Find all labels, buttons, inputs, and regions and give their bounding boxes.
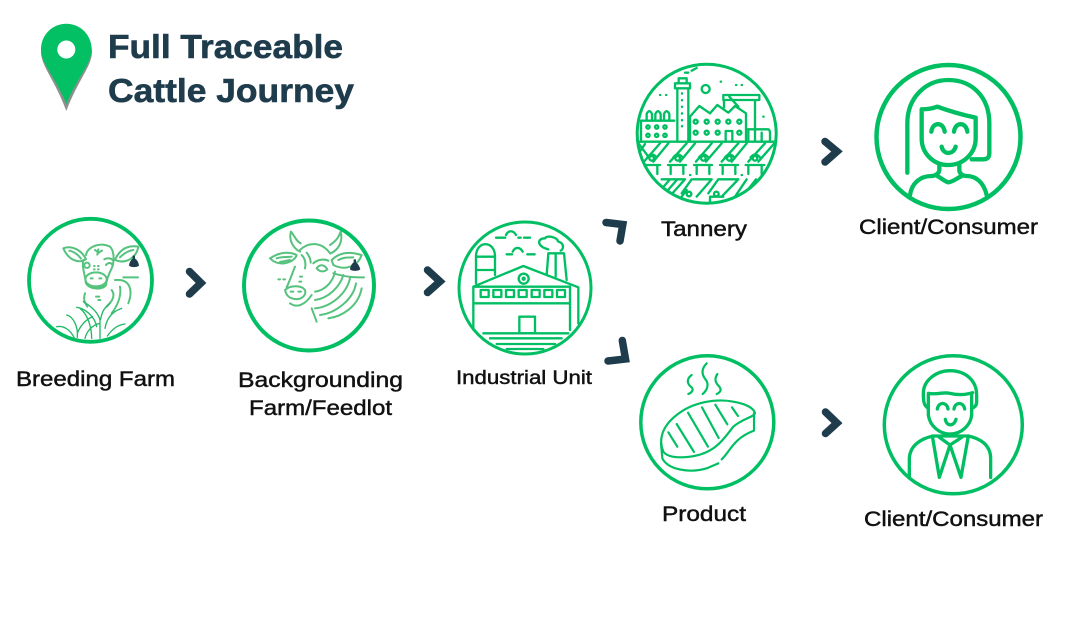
arrow: branch up to tannery [606,222,623,241]
infographic canvas [18,24,1043,526]
arrow: feedlot to industrial unit [428,270,440,292]
icon: ear tag [350,259,360,271]
arrow: tannery to client [825,142,837,162]
icon: industrial unit [459,222,591,354]
label: product: Product [662,503,746,526]
icon: tannery [637,64,777,203]
label: backgrounding farm/feedlot [238,369,403,420]
icon: cow head, backgrounding farm [244,220,374,350]
arrow: branch down to product [608,340,626,361]
label: backgrounding farm/feedlot: Backgrounding [238,369,403,392]
label: breeding farm: Breeding Farm [16,368,175,391]
title [108,28,355,109]
icon: man consumer [884,356,1022,494]
arrow: calf to feedlot [190,272,201,294]
label: client/consumer, top: Client/Consumer [859,216,1038,239]
label: client/consumer, bottom: Client/Consumer [864,508,1043,531]
icon: steak [641,356,774,489]
icon: ear tag [129,256,139,267]
label: backgrounding farm/feedlot: Farm/Feedlot [249,397,392,420]
arrow: product to client [826,412,837,434]
title: Cattle Journey [108,72,355,109]
icon: woman consumer [876,65,1020,209]
label: industrial unit: Industrial Unit [456,368,593,389]
title: Full Traceable [108,28,343,65]
label: tannery: Tannery [661,218,748,241]
icon: calf in grass, breeding farm [29,219,152,342]
icon: location pin [41,24,92,111]
